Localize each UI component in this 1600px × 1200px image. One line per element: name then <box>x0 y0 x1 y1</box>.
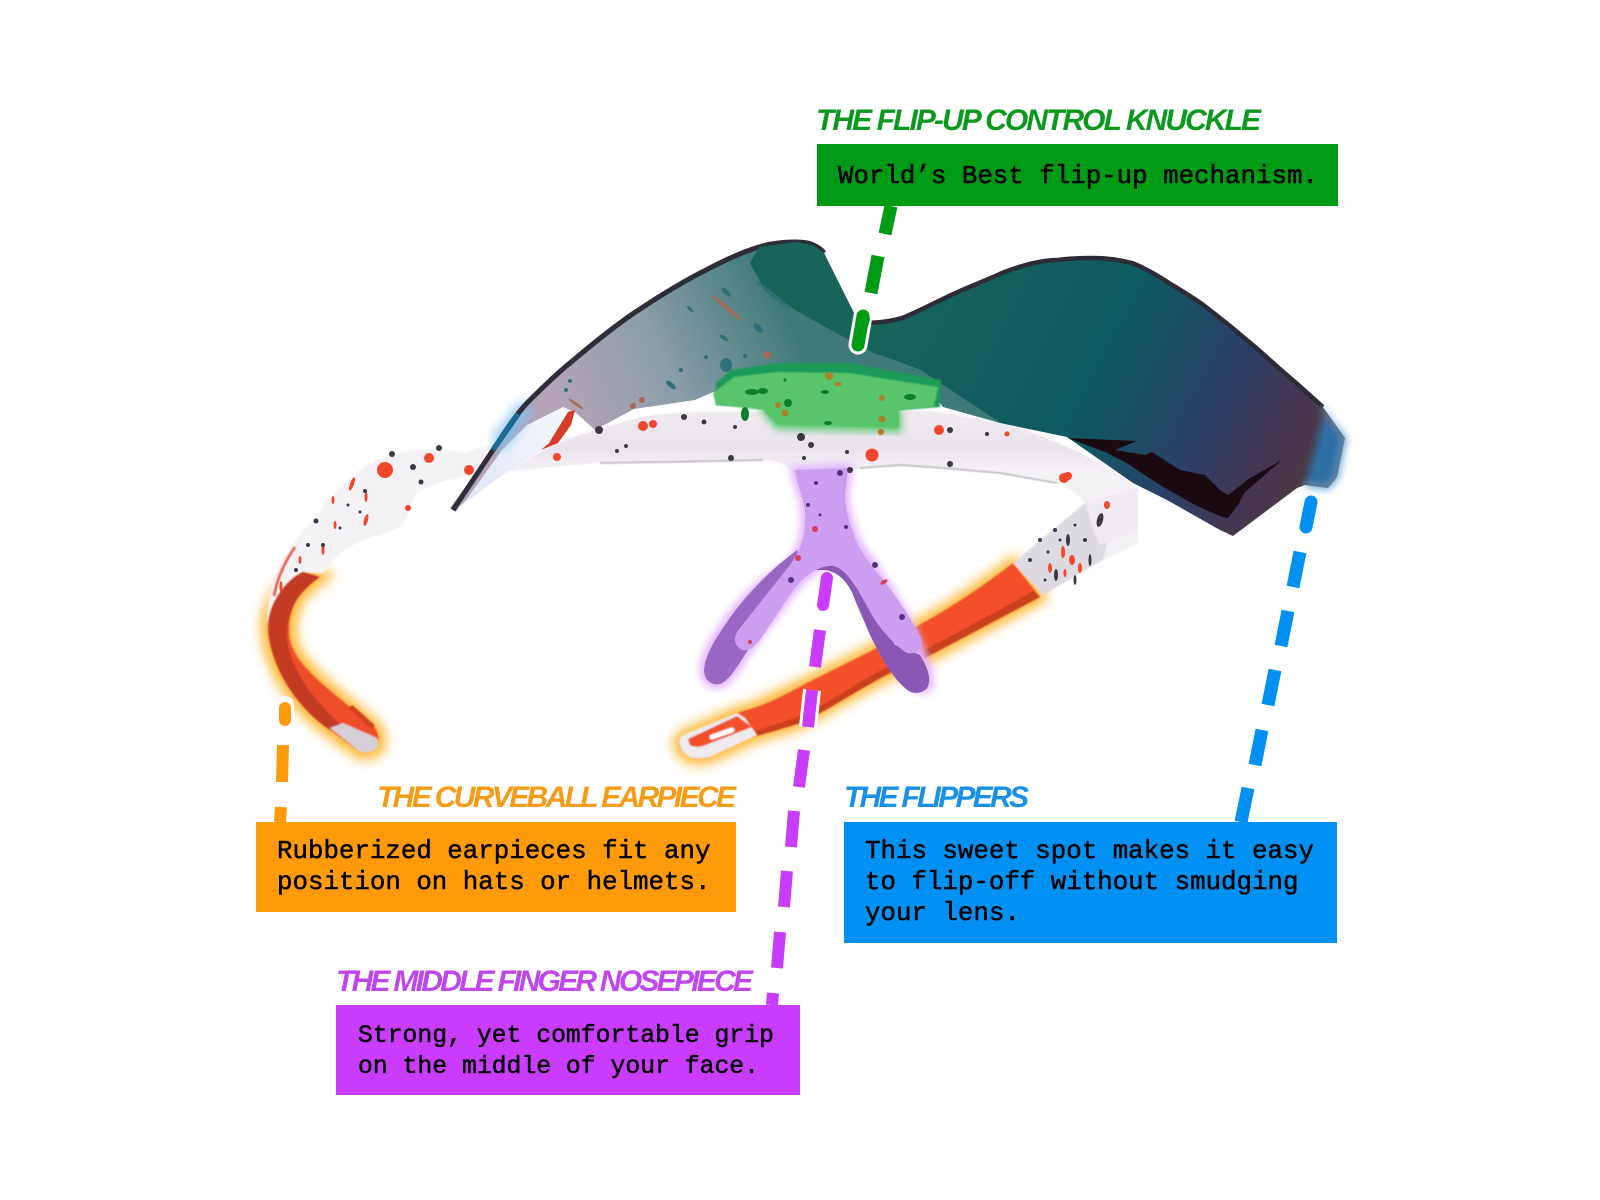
description: This sweet spot makes it easy <box>865 837 1314 866</box>
description: your lens. <box>865 899 1020 928</box>
heading: THE FLIPPERS <box>844 781 1029 814</box>
callout: flip-up control knuckle <box>816 104 1338 345</box>
right lens tip tint <box>1305 415 1345 488</box>
flip-up control knuckle <box>713 363 941 430</box>
dark right pad <box>815 562 929 693</box>
label box <box>817 144 1338 206</box>
nosepiece glow <box>704 468 929 689</box>
dark left pad <box>704 550 810 684</box>
heading: THE MIDDLE FINGER NOSEPIECE <box>336 965 754 998</box>
knuckle light face <box>713 372 938 428</box>
right temple arm <box>679 563 1040 758</box>
connector dashes <box>772 578 827 1005</box>
front right lens <box>750 242 1345 536</box>
knuckle dark band <box>716 363 941 410</box>
rust marks on back lens <box>568 294 771 410</box>
label box <box>844 822 1337 943</box>
heading: THE FLIP-UP CONTROL KNUCKLE <box>816 104 1262 137</box>
earpiece glow <box>268 563 1040 758</box>
left temple arm <box>267 440 525 633</box>
label box <box>256 822 736 912</box>
back lens blue edge segment <box>493 414 518 450</box>
red reflection wedge <box>541 410 575 450</box>
knuckle glow <box>763 410 899 430</box>
brown splatter on knuckle <box>775 372 886 434</box>
description: position on hats or helmets. <box>277 868 710 897</box>
sunglasses illustration <box>267 242 1345 758</box>
back lens body <box>450 242 1000 512</box>
paint splatter <box>280 279 1110 644</box>
red on nose <box>748 526 888 644</box>
right lens top edge <box>860 258 1323 407</box>
connector dashes <box>858 206 891 345</box>
connector dashes <box>280 705 285 822</box>
label box <box>336 1005 800 1095</box>
left earpiece <box>268 572 379 752</box>
main frame <box>506 410 1138 595</box>
lens reflection <box>459 407 575 507</box>
callout: middle finger nosepiece <box>336 578 827 1095</box>
description: World’s Best flip-up mechanism. <box>838 162 1318 191</box>
description: to flip-off without smudging <box>865 868 1298 897</box>
splatter on knuckle <box>741 378 916 425</box>
nosepiece <box>704 468 929 693</box>
callout: curveball earpiece <box>256 705 737 912</box>
right lens tip outline <box>1305 407 1345 488</box>
connector dashes <box>1241 502 1311 822</box>
lens logo <box>1068 438 1282 518</box>
description: on the middle of your face. <box>358 1053 759 1081</box>
description: Strong, yet comfortable grip <box>358 1022 774 1050</box>
blue edge glow <box>497 405 527 445</box>
marks on back lens <box>564 279 791 392</box>
description: Rubberized earpieces fit any <box>277 837 710 866</box>
splatter on nose <box>788 470 905 620</box>
light stem <box>735 468 922 653</box>
heading: THE CURVEBALL EARPIECE <box>377 781 737 814</box>
right lens body <box>750 242 1345 536</box>
callout: flippers <box>844 502 1337 943</box>
flip-up back lens <box>450 242 1000 512</box>
back lens top edge <box>453 242 824 510</box>
